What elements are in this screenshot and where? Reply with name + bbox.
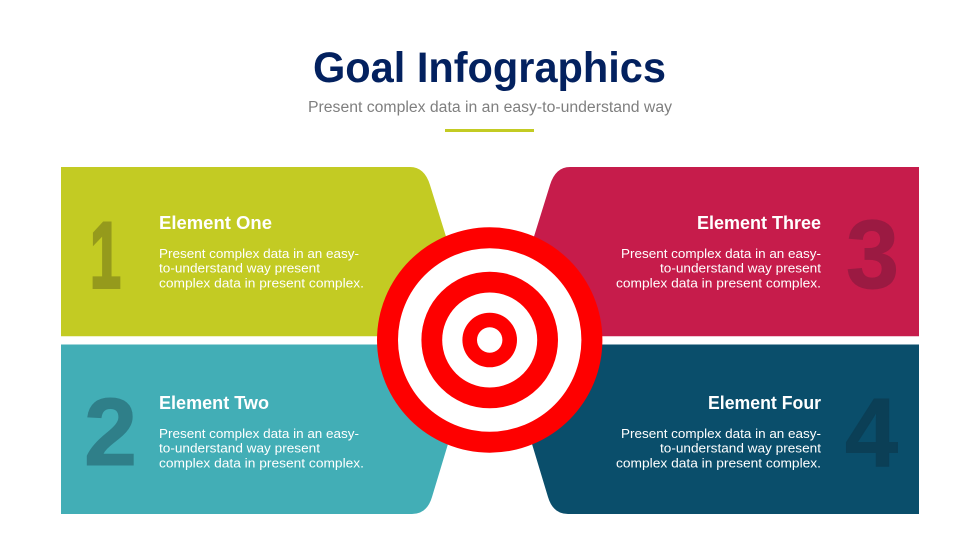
body text: element four: to-understand way present: [660, 440, 821, 456]
subtitle: Present complex data in an easy-to-understand way: [308, 99, 672, 116]
panel: element four: [502, 344, 919, 514]
body text: element two: complex data in present complex.: [159, 456, 364, 470]
body text: element one: Present complex data in an easy-: [159, 246, 359, 261]
panel shape: crimson: [503, 167, 919, 336]
panel shape: navy: [502, 344, 919, 514]
body text: element three: Present complex data in an easy-: [621, 246, 821, 261]
body text: element two: to-understand way present: [159, 440, 320, 456]
body text: element three: to-understand way present: [660, 260, 821, 276]
body text: element four: Present complex data in an easy-: [621, 426, 821, 441]
panel: element one: [61, 167, 477, 336]
body text: element three: [616, 246, 821, 290]
panel: element three: [503, 167, 919, 336]
body text: element three: complex data in present complex.: [616, 276, 821, 290]
body text: element one: to-understand way present: [159, 260, 320, 276]
body text: element one: complex data in present complex.: [159, 276, 364, 290]
body text: element two: [159, 426, 364, 470]
heading: element three: Element Three: [697, 213, 821, 233]
number 4: 4: [845, 378, 898, 487]
icon: target: [377, 227, 602, 453]
panel shape: teal: [61, 344, 478, 514]
body text: element one: [159, 246, 364, 290]
heading: element two: Element Two: [159, 393, 269, 413]
body text: element four: complex data in present complex.: [616, 456, 821, 470]
title: Goal Infographics: [313, 44, 666, 92]
heading: element one: Element One: [159, 213, 272, 233]
body text: element two: Present complex data in an easy-: [159, 426, 359, 441]
heading: element four: Element Four: [708, 393, 821, 413]
body text: element four: [616, 426, 821, 470]
panel shape: olive: [61, 167, 477, 336]
panel: element two: [61, 344, 478, 514]
number 3: 3: [846, 200, 899, 309]
number 2: 2: [84, 379, 137, 486]
title underline: [445, 129, 534, 132]
number 1: 1: [90, 202, 121, 308]
